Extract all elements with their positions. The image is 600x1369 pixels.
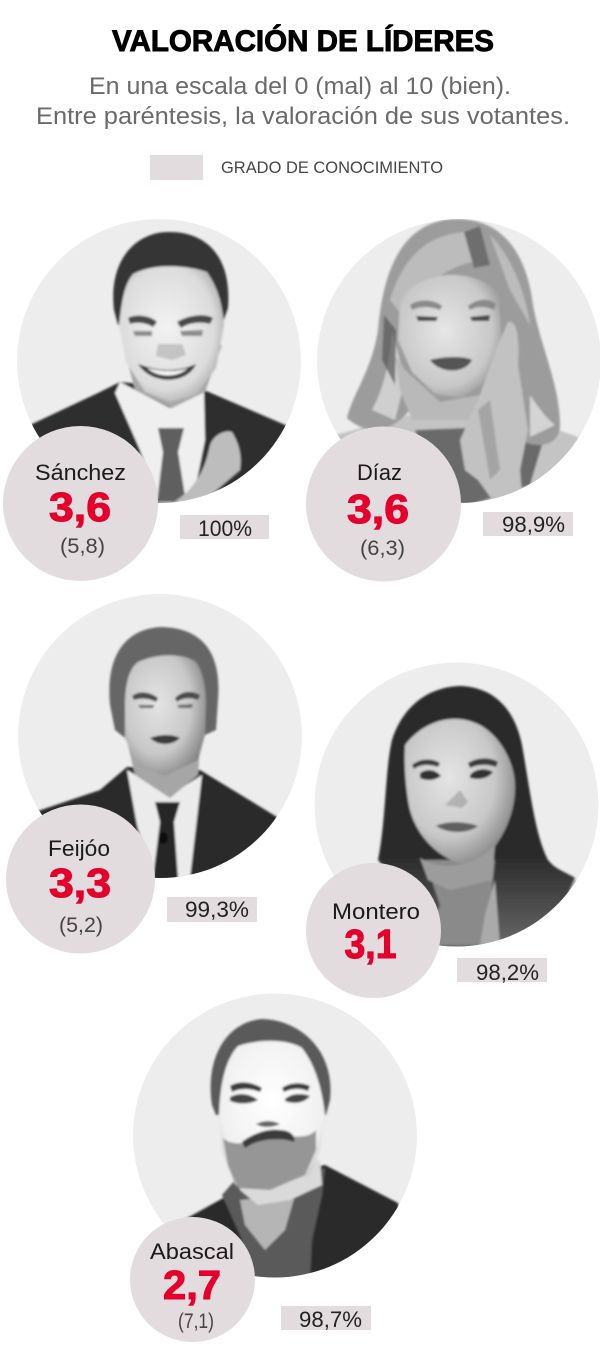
score circle: [306, 426, 461, 582]
score: 3,1: [344, 921, 396, 967]
score: 3,6: [347, 486, 409, 532]
subtitle: En una escala del 0 (mal) al 10 (bien).: [89, 73, 511, 100]
panel: Montero: [306, 662, 598, 998]
voters score: (6,3): [360, 537, 405, 560]
knowledge bar: [483, 512, 573, 537]
score circle: [6, 804, 155, 954]
portrait: Sánchez: [17, 219, 301, 510]
score circle: [306, 863, 441, 998]
portrait: Díaz: [317, 219, 600, 510]
knowledge bar: 98,7%: [299, 1307, 362, 1332]
panel: Abascal: [130, 994, 417, 1342]
score circle: [130, 1217, 255, 1342]
score circle: [3, 426, 158, 581]
voters score: (5,8): [60, 535, 105, 558]
subtitle: [36, 73, 570, 130]
knowledge bar: [167, 897, 257, 922]
knowledge bar: 98,2%: [476, 960, 539, 985]
title: VALORACIÓN DE LÍDERES: [112, 24, 494, 58]
name: Sánchez: [35, 460, 126, 485]
legend swatch: [150, 155, 203, 180]
knowledge bar: [457, 958, 547, 985]
knowledge bar: 99,3%: [185, 897, 249, 922]
name: Feijóo: [48, 836, 110, 861]
portrait: Feijóo: [18, 594, 302, 885]
voters score: (7,1): [178, 1310, 214, 1333]
subtitle: Entre paréntesis, la valoración de sus votantes.: [36, 103, 570, 130]
portrait: Abascal: [133, 994, 417, 1290]
score: 3,6: [49, 484, 111, 530]
portrait: Montero: [314, 662, 598, 950]
name: Díaz: [357, 460, 402, 485]
panel: Feijóo: [6, 594, 302, 954]
score: 3,3: [49, 860, 111, 906]
panel: Díaz: [306, 219, 600, 582]
score: 2,7: [163, 1262, 221, 1308]
knowledge bar: 100%: [198, 516, 252, 541]
knowledge bar: [281, 1306, 371, 1332]
panel: Sánchez: [3, 219, 301, 581]
legend: [150, 155, 443, 180]
voters score: (5,2): [59, 914, 103, 937]
knowledge bar: 98,9%: [502, 512, 565, 537]
name: Abascal: [150, 1239, 234, 1264]
legend label: GRADO DE CONOCIMIENTO: [221, 158, 443, 177]
name: Montero: [332, 899, 420, 924]
knowledge bar: [180, 515, 269, 541]
